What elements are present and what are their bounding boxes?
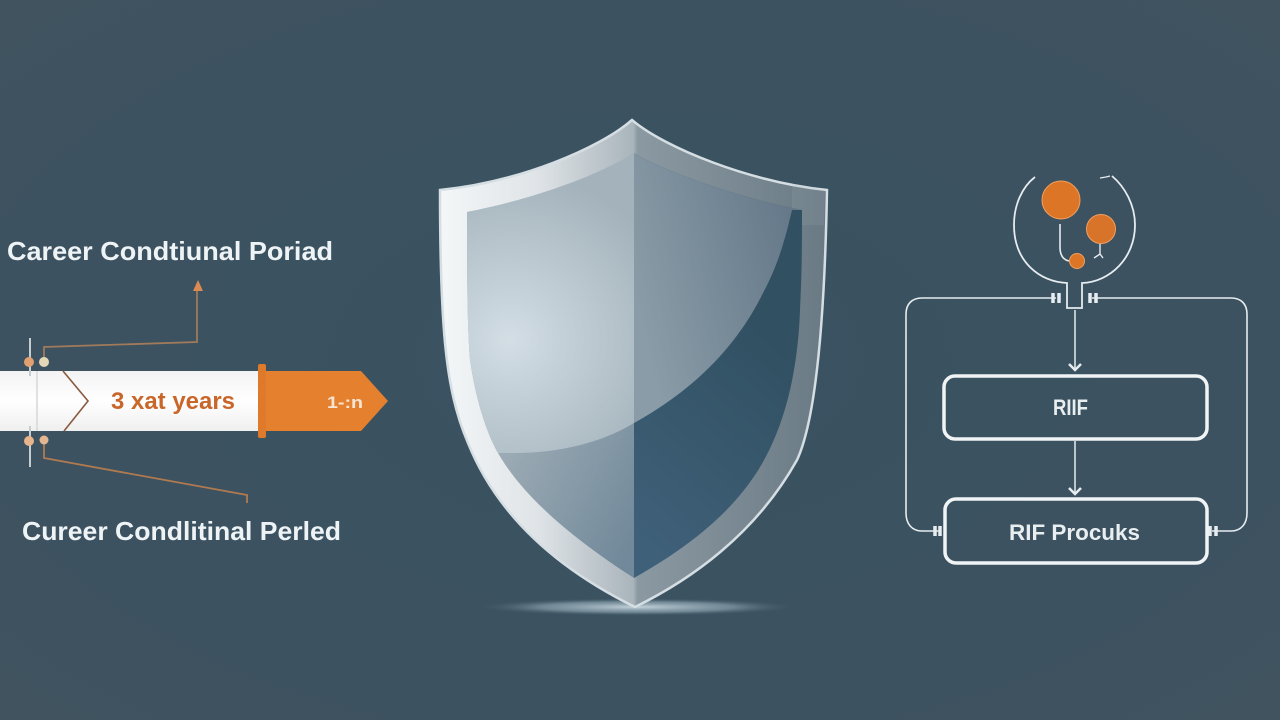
flask outline: [1014, 176, 1135, 308]
box label: RIF Procuks: [1009, 520, 1140, 545]
box label: RIIF: [1053, 395, 1088, 420]
arrowhead: [1069, 364, 1081, 370]
shield top right glint: [792, 184, 825, 225]
arrowhead: [1069, 488, 1081, 494]
flow diagram: [906, 176, 1247, 563]
box: RIF process: [945, 499, 1207, 563]
pin stem: [29, 338, 31, 376]
pin stem: [29, 426, 31, 467]
white bar: [0, 371, 259, 431]
connector line: [44, 290, 197, 362]
upper heading: Career Condtiunal Poriad: [7, 236, 333, 266]
timeline bar: [0, 364, 388, 438]
orange circles: [1042, 181, 1116, 268]
loop markers: [935, 293, 1216, 536]
arrow label: 1-:n: [327, 393, 363, 412]
orange cap: [258, 364, 266, 438]
bar chevron: [63, 371, 88, 431]
pin dots: [24, 436, 34, 446]
bar label: 3 xat years: [111, 388, 235, 415]
box: RIF: [944, 376, 1207, 439]
shield inner face: [460, 150, 810, 585]
right feedback loop: [1092, 298, 1247, 531]
shield outer rim: [440, 120, 827, 607]
flask tick: [1100, 176, 1110, 178]
orange arrow: [266, 371, 388, 431]
arrow to RIF box: [1074, 310, 1076, 370]
pin dots: [24, 357, 34, 367]
flask inner lines: [1060, 224, 1069, 261]
lower connector: [24, 426, 247, 503]
shield ground glow: [475, 598, 799, 616]
lower heading: Cureer Condlitinal Perled: [22, 516, 341, 546]
arrow between boxes: [1074, 441, 1076, 494]
left feedback loop: [906, 298, 1056, 531]
bar divider: [36, 371, 38, 431]
upper connector: [24, 280, 203, 376]
connector line: [44, 440, 247, 503]
shield: [440, 120, 827, 616]
connector arrowhead: [193, 280, 203, 291]
